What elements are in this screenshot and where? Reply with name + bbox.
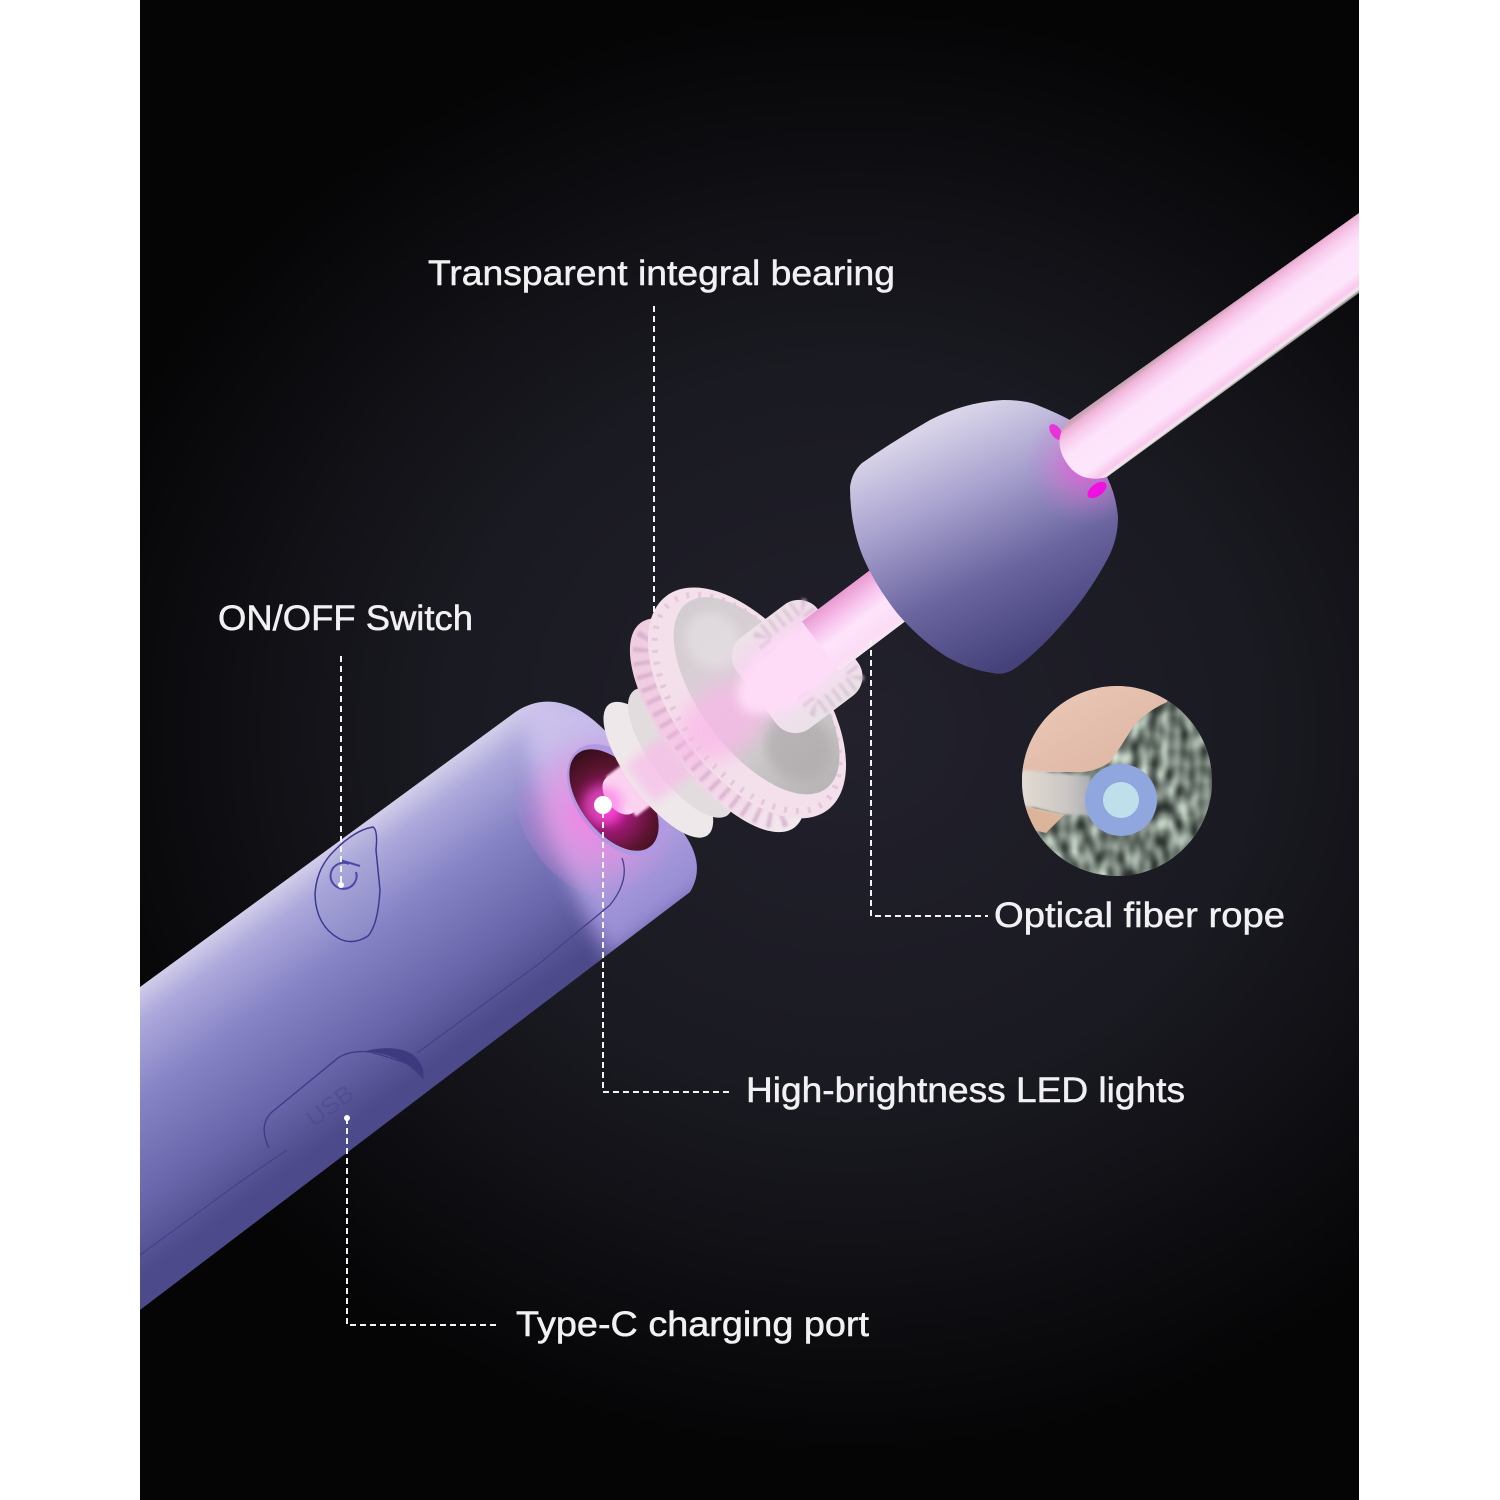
callout: transparent integral bearing: Transparent integral bearing: [428, 254, 895, 293]
bright core: [1103, 782, 1139, 818]
LED cavity: [567, 744, 664, 856]
callout: high-brightness LED lights: High-brightness LED lights: [746, 1071, 1185, 1110]
product illustration: [140, 213, 1359, 1310]
callout: type-c charging port: [344, 1115, 869, 1344]
charging port cover: [264, 1048, 424, 1148]
callout: on/off switch: [218, 599, 473, 888]
callout: optical fiber rope: Optical fiber rope: [994, 896, 1285, 935]
power button: [315, 827, 380, 942]
callout: type-c charging port: Type-C charging port: [516, 1305, 869, 1344]
skin area: [1020, 685, 1172, 775]
callout: high-brightness LED lights: [603, 812, 1185, 1110]
charging port cover: USB: [301, 1080, 359, 1133]
callout: on/off switch: ON/OFF Switch: [218, 599, 473, 638]
clear fiber handle: [1020, 770, 1092, 815]
handle body: [140, 697, 720, 1310]
far section of optical fiber rope: [1059, 213, 1359, 479]
skin lower fragment: [1025, 806, 1064, 833]
silicone end cap: [850, 400, 1118, 674]
transparent integral bearing: [602, 570, 905, 838]
threaded boss: [732, 570, 905, 734]
LED light glow: [583, 785, 623, 825]
bearing knurled cup: [630, 588, 846, 832]
bearing base flange: [602, 688, 731, 838]
blue glowing tip: [1085, 764, 1157, 836]
callout: optical fiber rope: [871, 640, 1285, 935]
near section of optical fiber rope: [818, 570, 905, 659]
inset photo: glowing fiber tip: [1020, 685, 1215, 880]
